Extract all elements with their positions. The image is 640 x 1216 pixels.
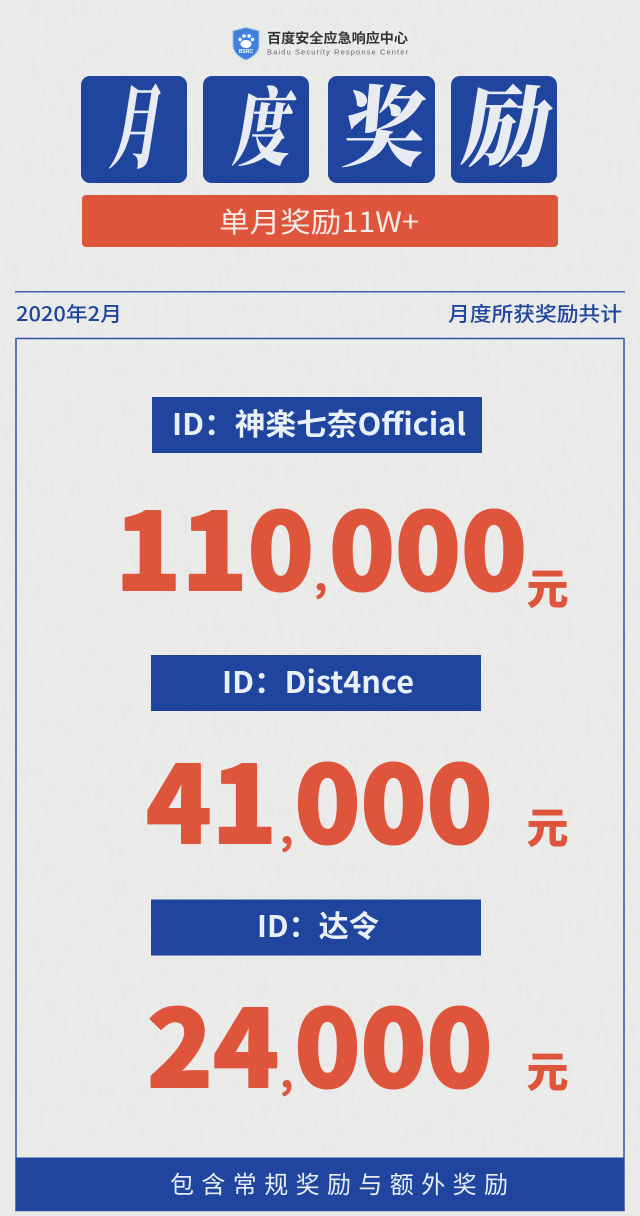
footer band: 包含常规奖励与额外奖励	[170, 1165, 508, 1200]
tile: 励: 励	[456, 59, 562, 185]
id tag	[151, 655, 481, 711]
winner 2	[146, 655, 569, 874]
amount: 元	[526, 795, 569, 856]
icon: shield with paw: BSRC	[239, 49, 253, 55]
amount: 元	[526, 556, 569, 617]
amount	[115, 467, 569, 621]
amount: 110	[115, 467, 314, 621]
amount: 41	[146, 720, 277, 874]
amount: ,	[314, 547, 327, 602]
winner 1	[115, 397, 569, 621]
date: 2020年2月	[16, 298, 122, 327]
amount	[147, 964, 569, 1118]
amount: ,	[280, 1044, 293, 1099]
winner 3	[147, 900, 569, 1118]
amount: ,	[280, 800, 293, 855]
amount: 24	[147, 964, 279, 1118]
logo name: 百度安全应急响应中心	[267, 27, 409, 47]
tile: 奖: 奖	[339, 58, 431, 185]
icon: shield with paw	[233, 28, 259, 60]
subtitle banner	[82, 195, 558, 247]
tile: 月: 月	[104, 55, 174, 187]
amount: 000	[329, 467, 527, 621]
title tiles	[81, 55, 562, 187]
main panel	[16, 338, 624, 1210]
id tag: ID：神楽七奈Official	[172, 400, 466, 444]
tile: 度: 度	[228, 60, 304, 182]
id tag: ID：达令	[257, 902, 379, 946]
date and summary row	[15, 291, 625, 327]
logo subtitle: Baidu Security Response Center	[267, 48, 408, 56]
amount	[146, 720, 569, 874]
footer band	[16, 1158, 624, 1210]
amount: 元	[526, 1039, 569, 1100]
amount: 000	[294, 964, 492, 1118]
subtitle banner: 单月奖励11W+	[219, 201, 419, 241]
id tag	[151, 900, 481, 956]
summary label: 月度所获奖励共计	[448, 298, 622, 327]
tile: 月	[81, 55, 187, 187]
id tag: ID：Dist4nce	[222, 658, 414, 702]
logo	[233, 27, 409, 60]
amount: 000	[294, 720, 492, 874]
id tag	[152, 397, 482, 453]
